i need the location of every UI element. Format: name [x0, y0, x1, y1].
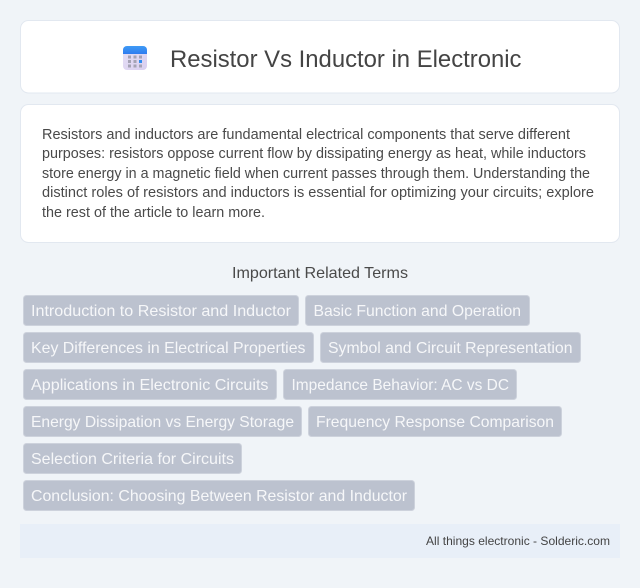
tag: energy	[24, 406, 302, 436]
tag: frequency	[308, 406, 562, 436]
panel: header card	[20, 20, 620, 93]
tag: introduction: Introduction to Resistor and Inductor	[31, 303, 292, 320]
tag: conclusion	[24, 480, 414, 510]
tag: symbol and circuit	[320, 332, 580, 362]
tag: symbol and circuit: Symbol and Circuit Representation	[328, 340, 572, 357]
text block: introduction paragraph: distinct roles of resistors and inductors is essential for optimizing your circuits; explore	[42, 185, 594, 201]
tag: selection criteria	[24, 444, 242, 474]
tag list	[24, 296, 580, 510]
tag: introduction	[24, 296, 298, 326]
tag: energy: Energy Dissipation vs Energy Storage	[31, 414, 294, 431]
tag: key differences: Key Differences in Electrical Properties	[31, 340, 306, 357]
tag: conclusion: Conclusion: Choosing Between Resistor and Inductor	[31, 488, 408, 505]
tag: impedance	[284, 370, 516, 400]
text block: introduction paragraph: purposes: resistors oppose current flow by dissipating energy as heat, while inductors	[42, 146, 586, 162]
footer: All things electronic - Solderic.com	[426, 534, 610, 548]
tag: applications: Applications in Electronic Circuits	[31, 377, 268, 394]
heading: important related terms: Important Related Terms	[232, 265, 408, 282]
title: Resistor Vs Inductor in Electronic	[170, 46, 522, 73]
panel: introduction text card	[20, 104, 620, 242]
icon: calendar grid	[123, 46, 147, 70]
tag: key differences	[24, 332, 314, 362]
tag: basic function	[306, 296, 530, 326]
text block: introduction paragraph: store energy in a magnetic field when current passes through them. Understanding the	[42, 166, 590, 182]
tag: impedance: Impedance Behavior: AC vs DC	[292, 377, 509, 394]
tag: basic function: Basic Function and Operation	[314, 303, 521, 320]
tag: frequency: Frequency Response Comparison	[316, 414, 554, 431]
tag: applications	[24, 370, 276, 400]
text block: introduction paragraph	[42, 127, 594, 221]
text block: introduction paragraph: Resistors and inductors are fundamental electrical components that serve different	[42, 127, 570, 143]
footer	[20, 524, 620, 558]
text block: introduction paragraph: the rest of the article to learn more.	[42, 205, 265, 221]
tag: selection criteria: Selection Criteria for Circuits	[31, 451, 234, 468]
